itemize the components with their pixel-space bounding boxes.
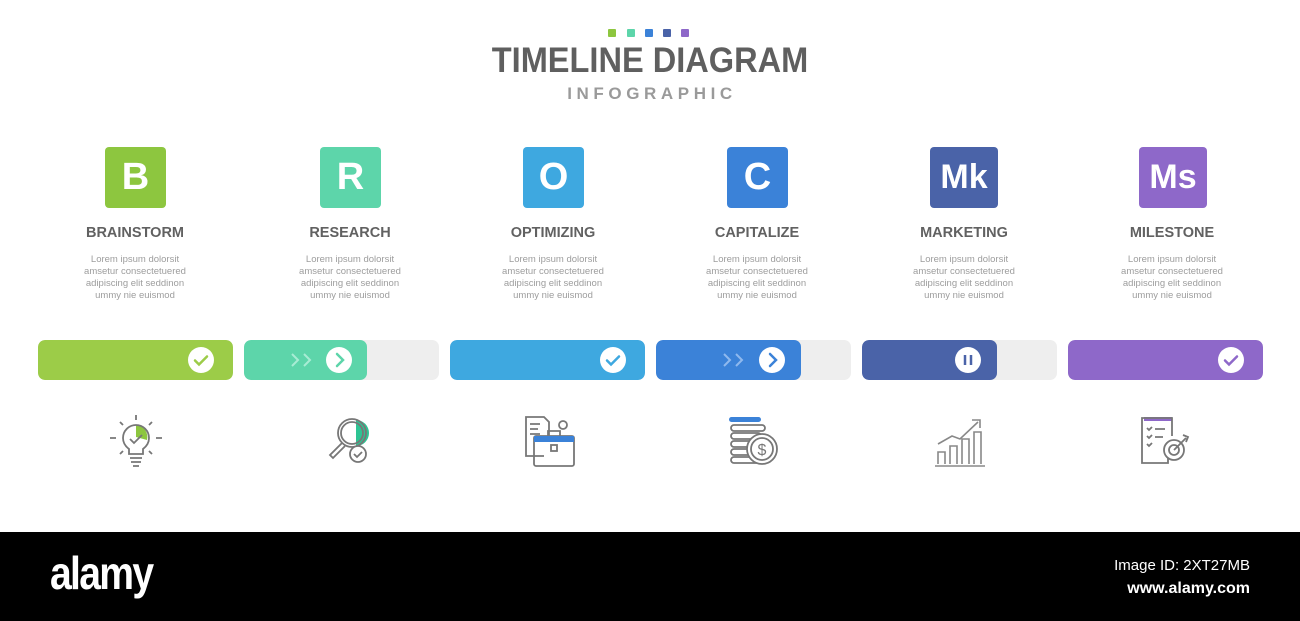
text: amsetur consectetuered (913, 266, 1015, 277)
text: adipiscing elit seddinon (86, 278, 184, 289)
text: amsetur consectetuered (502, 266, 604, 277)
text: ummy nie euismod (924, 290, 1004, 301)
icon square C (727, 147, 788, 208)
icon: checklist target (1141, 417, 1190, 464)
progress bar 6 (1068, 340, 1263, 380)
heading: CAPITALIZE (715, 225, 799, 241)
text: adipiscing elit seddinon (915, 278, 1013, 289)
icon square B (105, 147, 166, 208)
icon: growth chart (935, 419, 985, 467)
heading: RESEARCH (309, 225, 391, 241)
icon square Ms: Ms (1149, 158, 1197, 196)
footer bar (0, 532, 1300, 621)
heading: OPTIMIZING (511, 225, 595, 241)
text (1121, 254, 1223, 301)
progress bar 2 (244, 340, 439, 380)
icon: coins (729, 417, 778, 465)
icon: light bulb (110, 415, 162, 467)
icon square R (320, 147, 381, 208)
heading: MILESTONE (1130, 225, 1214, 241)
image id: Image ID: 2XT27MB (1114, 557, 1250, 574)
text: adipiscing elit seddinon (1123, 278, 1221, 289)
text: amsetur consectetuered (299, 266, 401, 277)
text (502, 254, 604, 301)
text (84, 254, 186, 301)
icon: coins: $ (758, 442, 767, 459)
text: adipiscing elit seddinon (301, 278, 399, 289)
icon: magnifier (328, 418, 369, 463)
step 6: milestone (1121, 147, 1223, 301)
text (913, 254, 1015, 301)
text: adipiscing elit seddinon (504, 278, 602, 289)
icon square Mk: Mk (940, 158, 988, 196)
icon square R: R (337, 156, 364, 198)
progress bar 5 (862, 340, 1057, 380)
step 3: optimizing (502, 147, 604, 301)
icon: briefcase document (525, 416, 575, 467)
step 1: brainstorm (84, 147, 186, 301)
text: ummy nie euismod (513, 290, 593, 301)
text: adipiscing elit seddinon (708, 278, 806, 289)
text: Lorem ipsum dolorsit (920, 254, 1008, 265)
heading: BRAINSTORM (86, 225, 184, 241)
text: Lorem ipsum dolorsit (91, 254, 179, 265)
progress bar 1 (38, 340, 233, 380)
subtitle: INFOGRAPHIC (567, 84, 737, 103)
icon square B: B (122, 156, 149, 198)
text: Lorem ipsum dolorsit (306, 254, 394, 265)
text: amsetur consectetuered (706, 266, 808, 277)
text: amsetur consectetuered (1121, 266, 1223, 277)
progress bar 3 (450, 340, 645, 380)
text: Lorem ipsum dolorsit (1128, 254, 1216, 265)
text: Lorem ipsum dolorsit (509, 254, 597, 265)
title: TIMELINE DIAGRAM (492, 41, 808, 80)
heading: MARKETING (920, 225, 1008, 241)
text: ummy nie euismod (717, 290, 797, 301)
title decoration dots (608, 29, 689, 37)
image id: www.alamy.com (1127, 580, 1250, 597)
step 4: capitalize (706, 147, 808, 301)
text: ummy nie euismod (1132, 290, 1212, 301)
progress bar 4 (656, 340, 851, 380)
logo: alamy (50, 547, 152, 599)
step 2: research (299, 147, 401, 301)
icon square Ms (1139, 147, 1207, 208)
text: amsetur consectetuered (84, 266, 186, 277)
text: ummy nie euismod (95, 290, 175, 301)
text (706, 254, 808, 301)
icon square Mk (930, 147, 998, 208)
step 5: marketing (913, 147, 1015, 301)
text: Lorem ipsum dolorsit (713, 254, 801, 265)
text: ummy nie euismod (310, 290, 390, 301)
image id (1114, 557, 1250, 597)
icon square O: O (539, 156, 568, 198)
text (299, 254, 401, 301)
icon square O (523, 147, 584, 208)
icon square C: C (744, 156, 771, 198)
